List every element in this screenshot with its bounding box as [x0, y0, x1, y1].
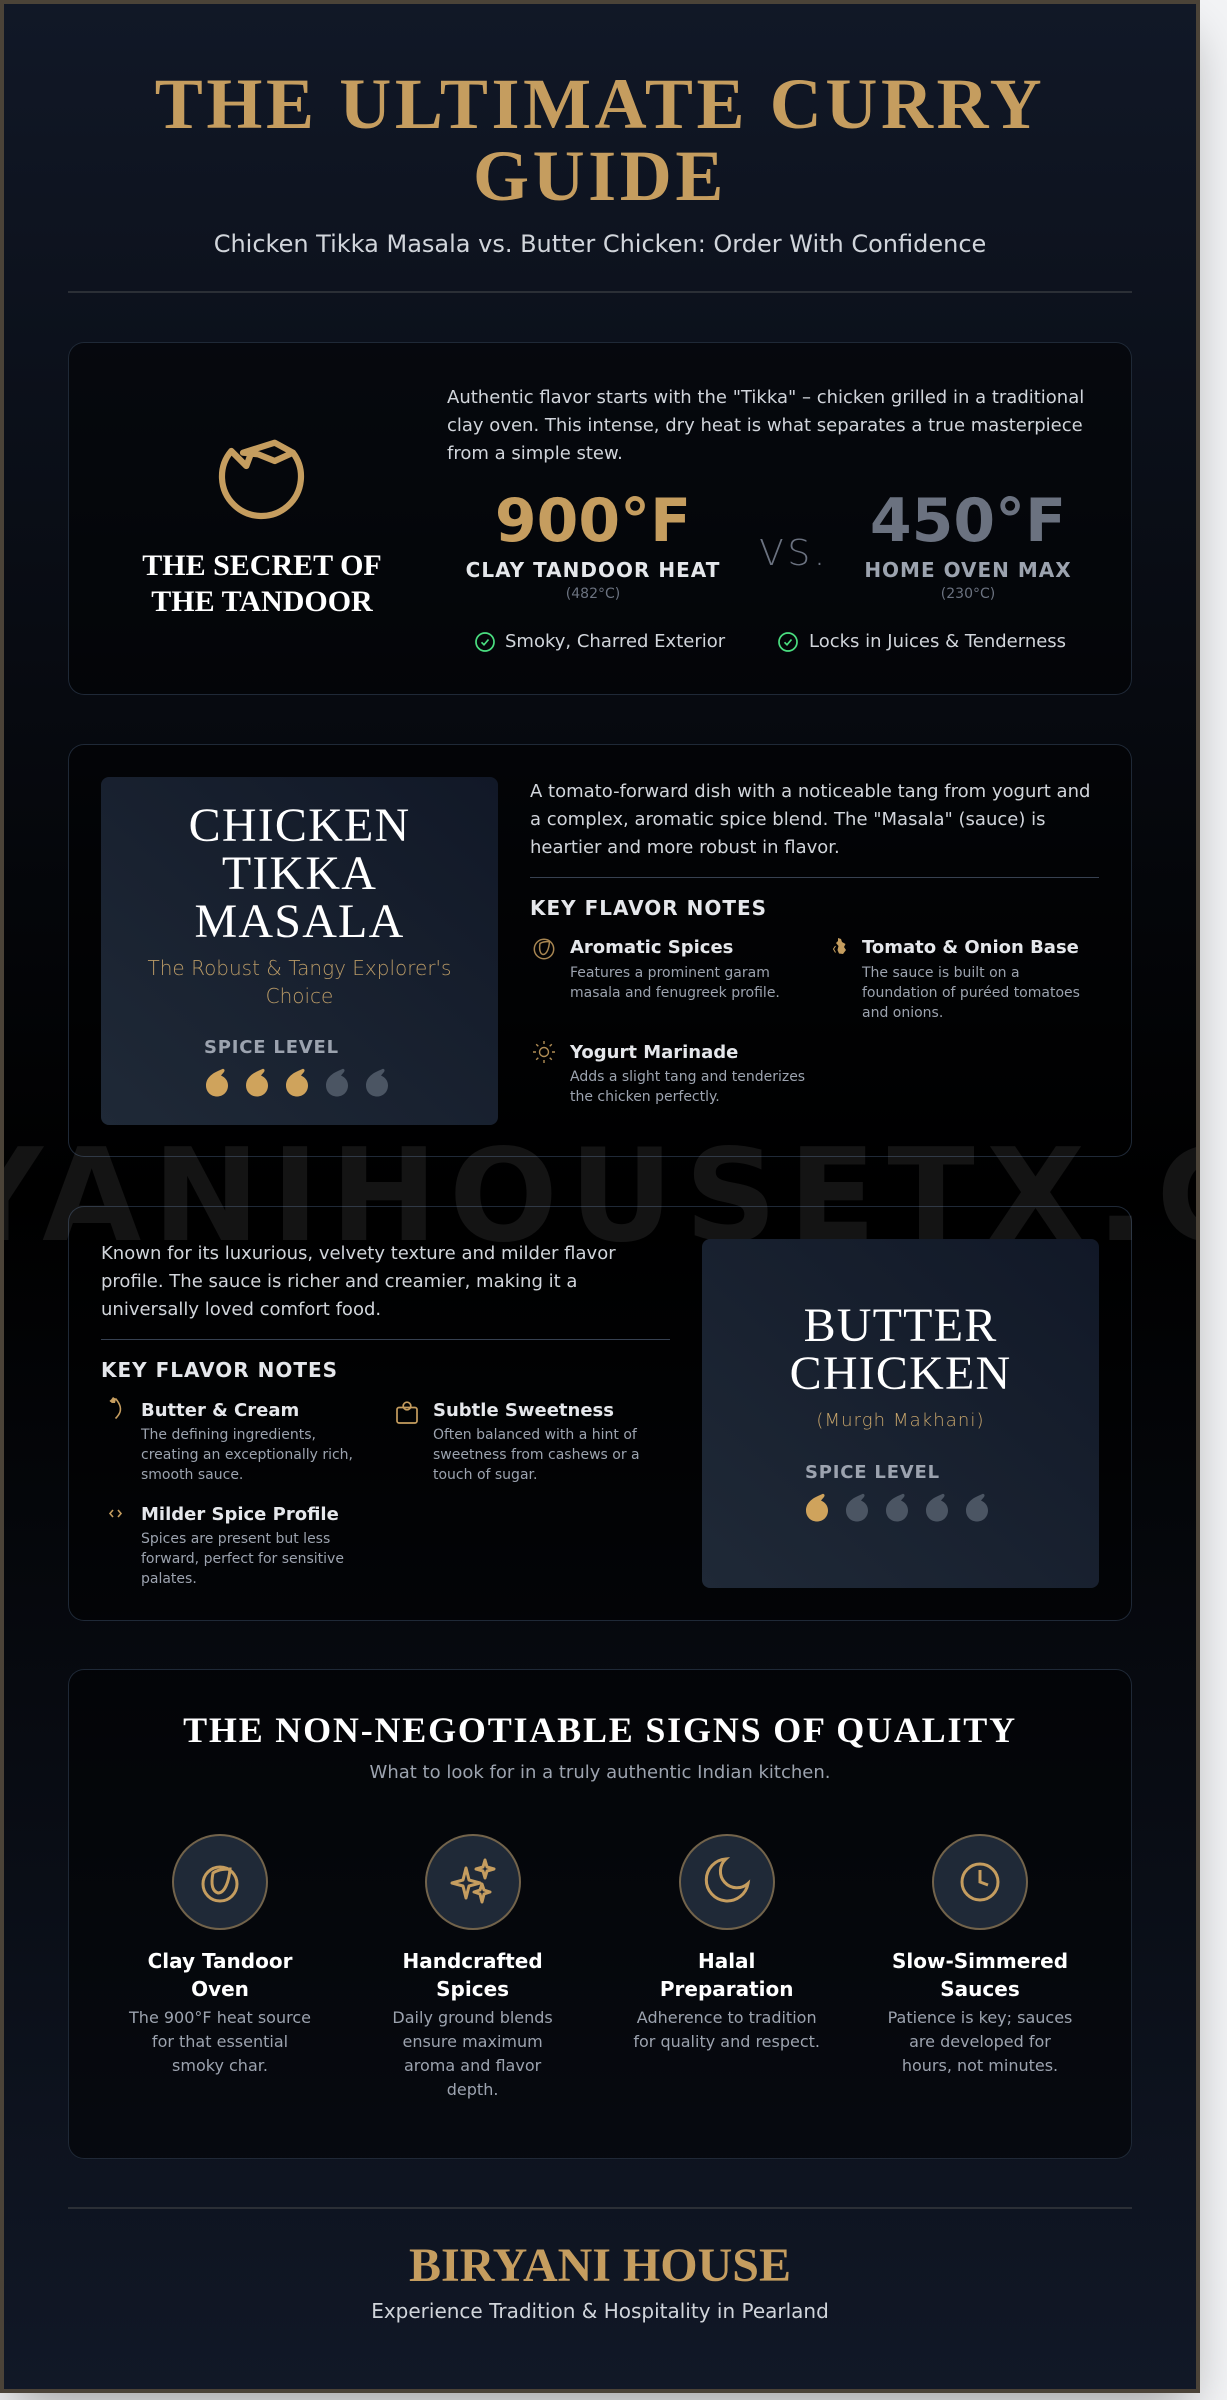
text: masala description	[530, 781, 1090, 858]
sign description: smoky char.	[172, 2056, 268, 2075]
icon: tandoor	[218, 440, 304, 520]
stat note: 482C: (482°C)	[566, 586, 620, 602]
text: masala description: heartier and more robust in flavor.	[530, 837, 840, 858]
sign description: The 900°F heat source	[129, 2008, 311, 2027]
flavor description: foundation of puréed tomatoes	[862, 985, 1080, 1001]
spice label: SPICE LEVEL	[204, 1037, 339, 1058]
flavor: aromatic spices: Aromatic Spices	[570, 937, 733, 958]
benefit: juices: Locks in Juices & Tenderness	[809, 631, 1066, 652]
stat: 450F: 450°F	[870, 486, 1066, 556]
footer brand: BIRYANI HOUSE	[409, 2239, 791, 2292]
sign description: hours, not minutes.	[902, 2056, 1058, 2075]
benefit: charred exterior: Smoky, Charred Exterior	[505, 631, 725, 652]
flavor description	[141, 1531, 344, 1587]
dish name: BUTTER	[804, 1299, 997, 1352]
icon: aromatic spices	[534, 938, 554, 960]
flavor description: Adds a slight tang and tenderizes	[570, 1069, 805, 1085]
flavor description: touch of sugar.	[433, 1467, 537, 1483]
sign description: are developed for	[909, 2032, 1051, 2051]
dish tagline	[148, 956, 451, 1008]
sign title: Slow-Simmered	[892, 1949, 1068, 1973]
sign description: aroma and flavor	[404, 2056, 541, 2075]
heading: key flavor notes: KEY FLAVOR NOTES	[530, 896, 767, 920]
title	[155, 64, 1045, 216]
sign description	[633, 2008, 820, 2051]
flavor: tomato and onion: Tomato & Onion Base	[862, 937, 1079, 958]
dish tagline: Choice	[266, 984, 333, 1008]
icon: subtle sweetness	[396, 1401, 418, 1424]
flavor: subtle sweetness: Subtle Sweetness	[433, 1400, 614, 1421]
flavor description: forward, perfect for sensitive	[141, 1551, 344, 1567]
icon: butter and cream	[110, 1397, 122, 1420]
vs label: VS.	[759, 533, 829, 574]
stat: 900F: 900°F	[495, 486, 691, 556]
flavor description	[433, 1427, 640, 1483]
sign description: for that essential	[152, 2032, 288, 2051]
icon: tandoor circle	[172, 1834, 268, 1930]
flavor description	[140, 1427, 353, 1483]
dish card: butter chicken	[702, 1239, 1099, 1588]
flavor description: creating an exceptionally rich,	[141, 1447, 353, 1463]
subheading: What to look for in a truly authentic Indian kitchen.	[370, 1762, 830, 1783]
spice rating: 3 of 5	[206, 1068, 388, 1096]
sign description: for quality and respect.	[633, 2032, 820, 2051]
dish card: tikka masala	[101, 777, 498, 1125]
sign title: Preparation	[660, 1977, 794, 2001]
icon: check 1	[475, 632, 495, 652]
sign description: Daily ground blends	[392, 2008, 553, 2027]
text: tandoor intro: from a simple stew.	[447, 443, 623, 464]
subtitle: Chicken Tikka Masala vs. Butter Chicken: Order With Confidence	[214, 230, 986, 258]
icon: clock circle	[932, 1834, 1028, 1930]
icon: sparkles circle	[425, 1834, 521, 1930]
quality sign: slow-simmered sauces	[888, 1834, 1072, 2075]
text: tandoor intro: Authentic flavor starts with the "Tikka" – chicken grilled in a traditional	[447, 387, 1084, 408]
title: GUIDE	[473, 136, 727, 216]
sign title	[892, 1949, 1068, 2001]
stat note: 230C: (230°C)	[941, 586, 995, 602]
dish tagline: The Robust & Tangy Explorer's	[148, 956, 451, 980]
dish name	[189, 799, 410, 948]
text: butter chicken description: Known for its luxurious, velvety texture and milder flavor	[101, 1243, 616, 1264]
footer tagline: Experience Tradition & Hospitality in Pearland	[371, 2299, 829, 2323]
sign title	[403, 1949, 543, 2001]
flavor description: Often balanced with a hint of	[433, 1427, 637, 1443]
dish name: MASALA	[195, 895, 404, 948]
title: THE ULTIMATE CURRY	[155, 64, 1045, 144]
panel: butter chicken	[68, 1206, 1132, 1621]
panel: signs of quality	[68, 1669, 1132, 2159]
quality sign: clay tandoor oven	[128, 1834, 311, 2075]
dish tagline: (Murgh Makhani)	[816, 1410, 985, 1431]
stat label: clay tandoor heat: CLAY TANDOOR HEAT	[466, 558, 720, 582]
dish name: TIKKA	[222, 847, 377, 900]
dish name: CHICKEN	[790, 1347, 1011, 1400]
text: butter chicken description: profile. The sauce is richer and creamier, making it a	[101, 1271, 577, 1292]
sign title: Clay Tandoor	[148, 1949, 292, 1973]
flavor description: and onions.	[862, 1005, 943, 1021]
text: masala description: A tomato-forward dish with a noticeable tang from yogurt and	[530, 781, 1090, 802]
sign title	[660, 1949, 794, 2001]
flavor description: sweetness from cashews or a	[433, 1447, 640, 1463]
sign description: Patience is key; sauces	[888, 2008, 1072, 2027]
heading: secret of the tandoor: THE TANDOOR	[151, 585, 373, 618]
heading: secret of the tandoor: THE SECRET OF	[142, 549, 382, 582]
flavor: milder spice profile: Milder Spice Profile	[141, 1504, 339, 1525]
dish name	[790, 1299, 1011, 1400]
flavor description	[862, 965, 1080, 1021]
panel: chicken tikka masala	[68, 744, 1132, 1157]
icon: yogurt sun	[533, 1041, 555, 1063]
heading: key flavor notes: KEY FLAVOR NOTES	[101, 1358, 338, 1382]
sign description	[392, 2008, 553, 2099]
heading: signs of quality: THE NON-NEGOTIABLE SIGNS OF QUALITY	[183, 1710, 1017, 1750]
icon: check 2	[778, 632, 798, 652]
sign title: Handcrafted	[403, 1949, 543, 1973]
sign title: Spices	[436, 1977, 509, 2001]
sign description	[888, 2008, 1072, 2075]
flavor description: Features a prominent garam	[570, 965, 770, 981]
flavor description: smooth sauce.	[141, 1467, 243, 1483]
spice label: SPICE LEVEL	[805, 1462, 940, 1483]
quality sign: handcrafted spices	[392, 1834, 553, 2099]
panel: secret of the tandoor	[68, 342, 1132, 695]
flavor description: the chicken perfectly.	[570, 1089, 720, 1105]
text: butter chicken description: universally loved comfort food.	[101, 1299, 381, 1320]
sign title: Oven	[191, 1977, 249, 2001]
flavor: yogurt marinade: Yogurt Marinade	[570, 1042, 738, 1063]
flavor description: Spices are present but less	[141, 1531, 330, 1547]
icon: milder spice	[109, 1510, 122, 1518]
spice rating: 1 of 5	[806, 1494, 988, 1522]
sign title: Sauces	[940, 1977, 1020, 2001]
text: tandoor intro	[447, 387, 1084, 464]
sign description: Adherence to tradition	[637, 2008, 817, 2027]
text: masala description: a complex, aromatic spice blend. The "Masala" (sauce) is	[530, 809, 1045, 830]
sign description: depth.	[447, 2080, 498, 2099]
flavor description	[570, 965, 780, 1001]
icon: tomato and onion	[833, 938, 846, 954]
text: tandoor intro: clay oven. This intense, dry heat is what separates a true masterpiece	[447, 415, 1083, 436]
flavor description: The sauce is built on a	[862, 965, 1020, 981]
icon: moon circle	[679, 1834, 775, 1930]
quality sign: halal preparation	[633, 1834, 820, 2051]
flavor description: The defining ingredients,	[141, 1427, 316, 1443]
flavor: butter and cream: Butter & Cream	[141, 1400, 299, 1421]
heading: secret of the tandoor	[142, 549, 382, 618]
flavor description	[570, 1069, 805, 1105]
sign description: ensure maximum	[402, 2032, 543, 2051]
dish name: CHICKEN	[189, 799, 410, 852]
sign title: Halal	[698, 1949, 755, 1973]
sign description	[128, 2008, 311, 2075]
stat label: home oven max: HOME OVEN MAX	[864, 558, 1072, 582]
text: butter chicken description	[101, 1243, 616, 1320]
sign title	[148, 1949, 292, 2001]
flavor description: palates.	[141, 1571, 197, 1587]
flavor description: masala and fenugreek profile.	[570, 985, 780, 1001]
